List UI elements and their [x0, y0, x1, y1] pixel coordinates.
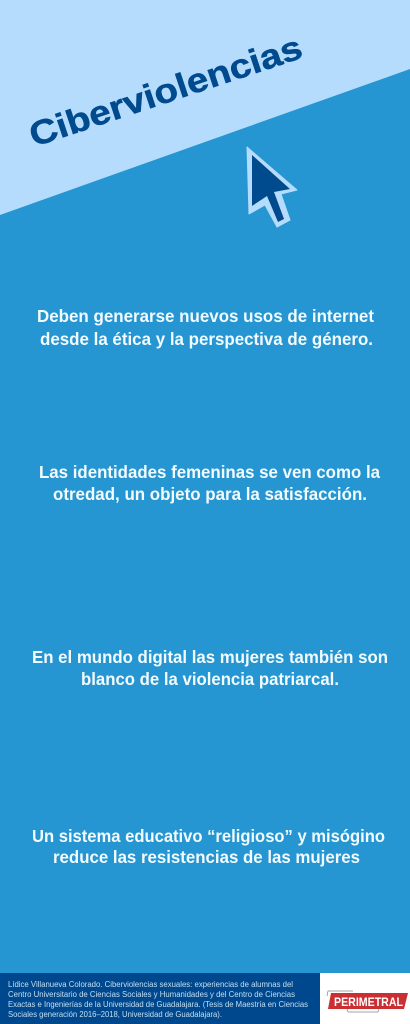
text block: sistema educativo — [32, 826, 385, 867]
text block: sistema educativo: reduce las resistencias de las mujeres — [53, 847, 360, 867]
text block: identidades femeninas: Las identidades femeninas se ven como la — [39, 462, 380, 482]
text block: identidades femeninas — [39, 462, 380, 504]
title: Ciberviolencias — [25, 29, 307, 155]
footer: Perimetral logo — [320, 973, 410, 1024]
text block: nuevos usos de internet — [37, 306, 374, 349]
text block: identidades femeninas: otredad, un objeto para la satisfacción. — [53, 484, 367, 504]
footer: source citation — [0, 973, 320, 1024]
text block: mundo digital: En el mundo digital las mujeres también son — [32, 647, 388, 667]
icon: mouse cursor — [247, 147, 297, 227]
footer: source citation: Exactas e Ingenierías de la Universidad de Guadalajara. (Tesis de Maestría en Ciencias — [8, 1000, 308, 1009]
text block: nuevos usos de internet: Deben generarse nuevos usos de internet — [37, 306, 374, 326]
footer: source citation: Lídice Villanueva Colorado. Ciberviolencias sexuales: experiencias de alumnas del — [8, 980, 293, 989]
footer: source citation: Sociales generación 2016–2018, Universidad de Guadalajara). — [8, 1010, 222, 1019]
text block: mundo digital — [32, 647, 388, 689]
text block: mundo digital: blanco de la violencia patriarcal. — [81, 669, 339, 689]
footer: Perimetral logo: PERIMETRAL — [334, 995, 403, 1009]
header banner — [0, 0, 410, 215]
text block: nuevos usos de internet: desde la ética y la perspectiva de género. — [40, 329, 373, 349]
text block: sistema educativo: Un sistema educativo “religioso” y misógino — [32, 826, 385, 846]
footer: source citation: Centro Universitario de Ciencias Sociales y Humanidades y del Centro de Ciencias — [8, 990, 295, 999]
